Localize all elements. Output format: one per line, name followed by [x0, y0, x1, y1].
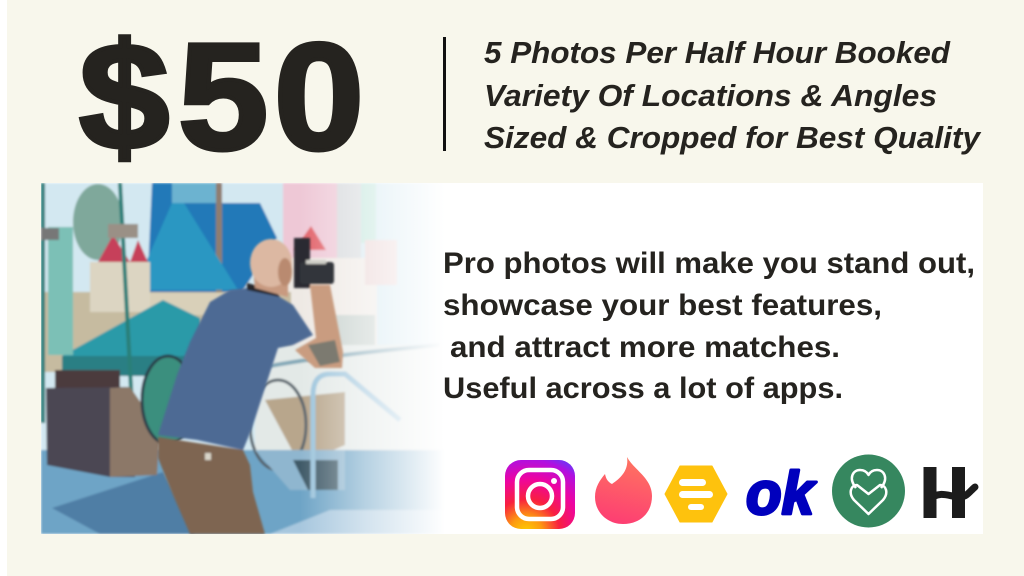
- dark base: [55, 370, 120, 390]
- teal roof: [62, 300, 205, 356]
- red turrets: [98, 235, 130, 262]
- ground: [41, 450, 450, 534]
- blue tower: [147, 183, 277, 295]
- body text: showcase your best features,: [443, 289, 882, 322]
- icon: instagram: [505, 460, 575, 529]
- icon: ok logo: ok: [746, 460, 817, 527]
- stone cube: [46, 387, 135, 477]
- body text: and attract more matches.: [450, 331, 840, 364]
- sky and glass: [41, 183, 416, 450]
- fade overlay: [300, 183, 450, 534]
- package features list: Sized & Cropped for Best Quality: [484, 120, 982, 155]
- escalator wheel: [142, 356, 194, 444]
- icon: tinder flame: [595, 457, 652, 524]
- railing: [313, 374, 400, 498]
- castle walls: [41, 292, 291, 372]
- white content panel: [41, 183, 983, 534]
- package features list: Variety Of Locations & Angles: [484, 78, 937, 113]
- divider: [443, 37, 446, 151]
- neck and head: [252, 276, 290, 298]
- collar strap: [247, 283, 280, 297]
- icon: bumble hexagon: [665, 466, 727, 522]
- tree: [73, 184, 123, 260]
- body text: Pro photos will make you stand out,: [443, 247, 975, 280]
- photo: photographer at castle: [41, 183, 436, 534]
- photographer: [158, 238, 343, 534]
- pants: [158, 437, 265, 534]
- shirt: [158, 288, 313, 450]
- camera: [294, 238, 310, 288]
- package features list: [484, 35, 982, 155]
- arms: [295, 285, 343, 368]
- price heading: $50: [79, 13, 364, 182]
- buildings: [283, 183, 337, 258]
- icon: hinge H: [930, 467, 975, 518]
- body text: [443, 247, 975, 405]
- glass panel: [48, 227, 73, 355]
- package features list: 5 Photos Per Half Hour Booked: [484, 35, 951, 70]
- icon: green heart circle: [832, 454, 905, 528]
- body text: Useful across a lot of apps.: [443, 372, 843, 405]
- pale background: [254, 345, 369, 450]
